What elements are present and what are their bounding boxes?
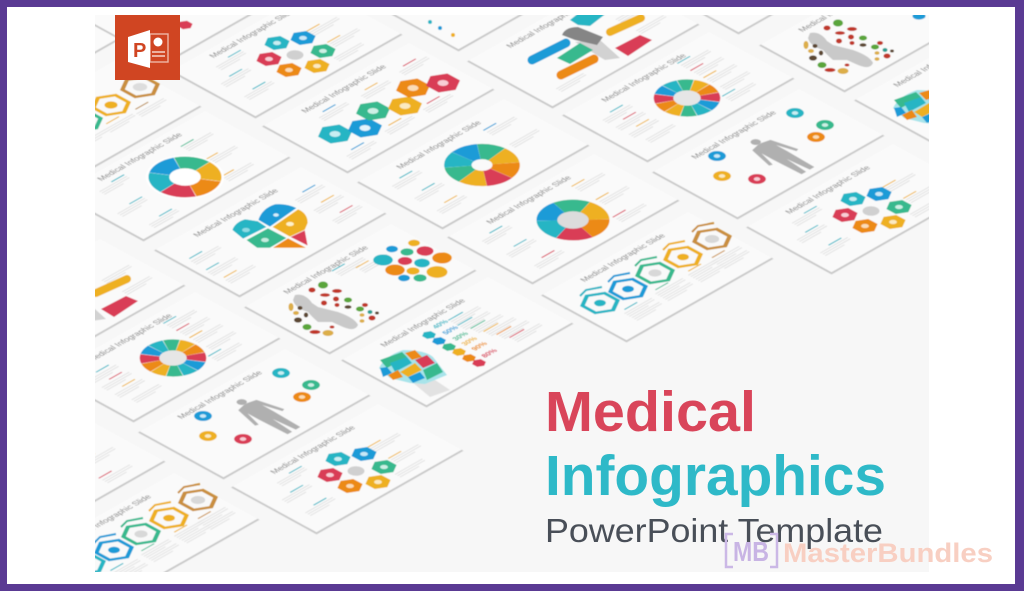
slide: wheel with 6 segments centre: Medical Infographic Slide [483, 174, 574, 225]
slide: donut [95, 132, 290, 242]
slide: human figure top: Medical Infographic Slide [688, 109, 779, 160]
slide: hexagon cluster right: Medical Infographic Slide [782, 164, 873, 215]
slide: hexagon chain [263, 43, 494, 172]
slide: top centre fragment with dots [392, 15, 523, 52]
slide: food, body and circles: Medical Infographic Slide [280, 244, 371, 295]
title: Medical: Medical [545, 380, 756, 444]
slide: hexagon rings centre: Medical Infographic Slide [577, 232, 668, 283]
title: Infographics: Infographics [545, 444, 886, 508]
slide: wheel with 12 segments lower left: Medical Infographic Slide [84, 312, 175, 363]
slide: hexagon cluster right [746, 166, 929, 274]
slide: brain with percentages: 40% [430, 318, 451, 330]
slide: hexagon rings lower left: Medical Infographic Slide [63, 493, 154, 544]
slide: hexagon rings upper left [95, 80, 202, 168]
slide: brain with percentages: Medical Infographic Slide [377, 297, 468, 348]
icon: PowerPoint logo [115, 15, 180, 80]
subtitle: PowerPoint Template [545, 512, 883, 549]
slide: hexagon cluster top: Medical Infographic Slide [206, 8, 297, 59]
slide: hexagon rings centre [542, 212, 773, 341]
slide collage [95, 15, 929, 572]
slide: brain with percentages [341, 299, 574, 408]
slide: food, body and circles [245, 224, 476, 353]
slide: brain with percentages: 50% [440, 324, 461, 336]
background panel [95, 15, 929, 572]
slide: top fragment with hexagon [95, 15, 252, 56]
slide: heart: Medical Infographic Slide [190, 187, 281, 238]
slide: food and body top right [759, 15, 929, 92]
slide: heart [154, 184, 386, 298]
watermark: MasterBundles: MB [733, 536, 769, 567]
slide: hand with bars, left fragment [95, 265, 186, 338]
slide: top right fragment [702, 15, 773, 34]
slide: wheel with 8 segments [357, 117, 590, 230]
slide: hexagon chain: Medical Infographic Slide [298, 63, 389, 114]
slide: brain with percentages: 30% [459, 335, 480, 347]
slide: wheel with 12 segments top: Medical Infographic Slide [598, 52, 689, 103]
slide: hand with bars [467, 15, 700, 108]
slide: wheel with 12 segments top [562, 50, 794, 162]
icon: PowerPoint logo: P [133, 40, 146, 62]
slide: donut: Medical Infographic Slide [94, 131, 185, 182]
slide: wheel with 6 segments centre [447, 173, 680, 284]
slide: brain right: Medical Infographic Slide [890, 37, 981, 88]
slide: hexagon cluster lower [231, 426, 464, 534]
slide: hexagon cluster lower: Medical Infographic Slide [267, 424, 358, 475]
slide: hexagon rings lower left [95, 482, 260, 572]
slide: top-left fragment [95, 40, 115, 54]
slide: wheel with 8 segments: Medical Infographic Slide [393, 119, 484, 170]
watermark: MasterBundles: MasterBundles [783, 538, 993, 568]
slide: human figure lower [138, 368, 370, 480]
slide: human figure lower: Medical Infographic Slide [174, 369, 265, 420]
slide: brain right [854, 64, 929, 142]
slide: brain with percentages: 80% [479, 347, 500, 359]
slide: brain with percentages: 90% [469, 340, 490, 352]
slide: hexagon cluster top [180, 15, 402, 118]
slide: wheel fragment lower left [95, 448, 166, 502]
title block [545, 380, 886, 549]
slide: brain with percentages: 30% [450, 330, 471, 342]
slide: wheel with 12 segments lower left [95, 310, 280, 422]
slide: human figure top [652, 108, 884, 220]
watermark: MasterBundles [726, 534, 993, 568]
